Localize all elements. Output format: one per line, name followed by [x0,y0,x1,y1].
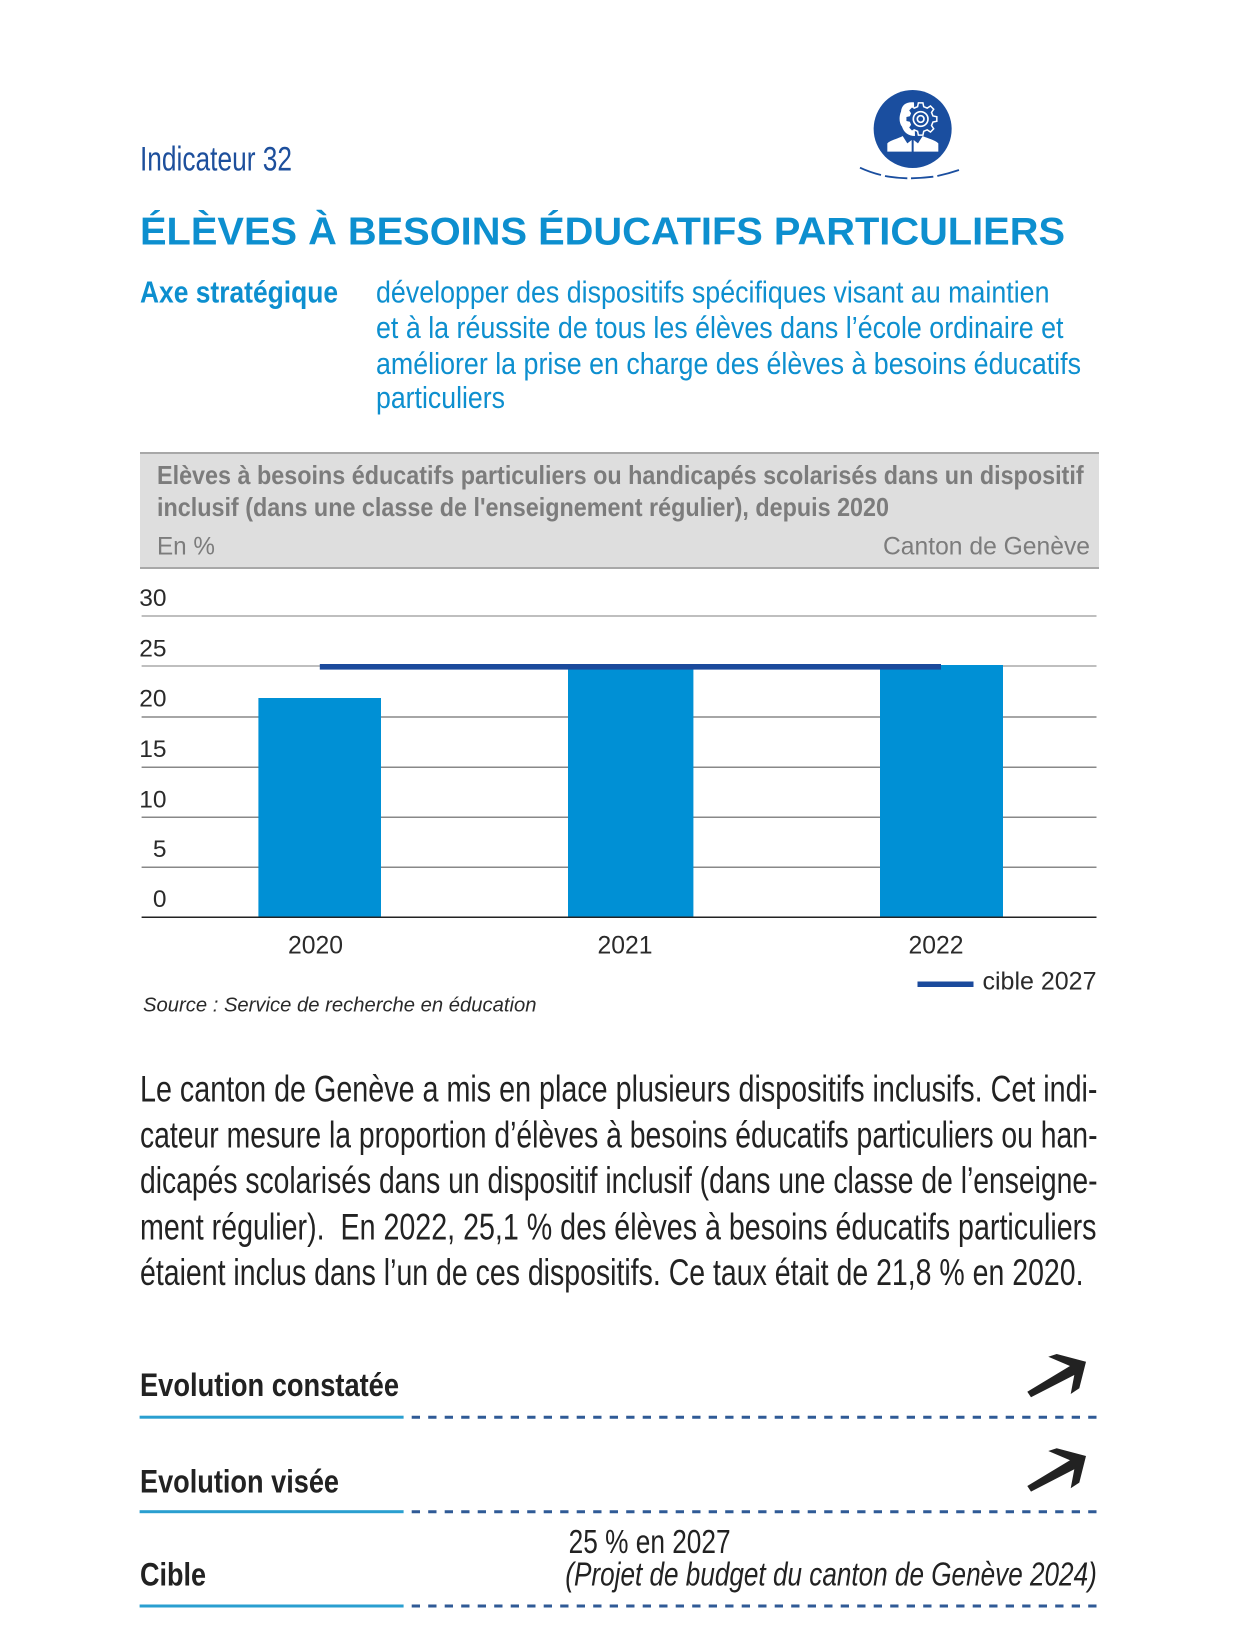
source: Source : Service de recherche en éducation [143,995,536,1017]
row: evolution visée: Evolution visée [140,1464,339,1500]
bar 2022 [880,665,1003,918]
x axis labels: 2020 [288,932,343,960]
legend: cible 2027 [918,968,1096,996]
strategic axis label: Axe stratégique [140,275,338,310]
chart header panel: En % [157,532,215,560]
bar 2020 [258,698,381,918]
y axis labels: 25 [139,636,166,663]
y axis labels: 5 [153,836,166,863]
chart header panel [140,452,1099,569]
y axis labels: 15 [139,736,166,763]
row: evolution visée [140,1448,1098,1513]
row: cible [140,1523,1098,1608]
row: cible: 25 % en 2027 [569,1523,731,1560]
y axis labels: 0 [153,886,166,913]
row: evolution constatée: Evolution constatée [140,1367,399,1403]
y axis labels [139,585,166,913]
chart header panel: inclusif (dans une classe de l'enseignement régulier), depuis 2020 [157,492,889,522]
strategic axis text [376,275,1081,415]
bar chart [139,585,1096,960]
title: ÉLÈVES À BESOINS ÉDUCATIFS PARTICULIERS [140,209,1065,253]
x axis labels: 2021 [598,932,652,960]
y axis labels: 20 [139,686,166,713]
x axis labels [288,932,964,960]
row: cible: (Projet de budget du canton de Genève 2024) [565,1556,1097,1593]
arrow up right [1027,1448,1086,1492]
y axis labels: 30 [139,585,166,612]
legend: cible 2027: cible 2027 [982,968,1096,996]
strategic axis text: développer des dispositifs spécifiques visant au maintien [376,275,1050,310]
icon: person with gear [860,90,959,178]
y axis labels: 10 [139,787,166,814]
strategic axis text: particuliers [376,380,505,415]
row: evolution constatée [140,1354,1098,1419]
bar 2021 [568,666,693,918]
x axis labels: 2022 [908,932,964,960]
row: cible: Cible [140,1557,206,1593]
body paragraph [140,1069,1098,1293]
strategic axis text: et à la réussite de tous les élèves dans l’école ordinaire et [376,310,1064,345]
chart header panel: Elèves à besoins éducatifs particuliers ou handicapés scolarisés dans un dispositif [157,460,1084,490]
target line [320,664,941,670]
arrow up right [1027,1354,1086,1397]
strategic axis text: améliorer la prise en charge des élèves à besoins éducatifs [376,346,1081,381]
indicator number: Indicateur 32 [140,141,292,179]
chart header panel: Canton de Genève [883,532,1090,560]
